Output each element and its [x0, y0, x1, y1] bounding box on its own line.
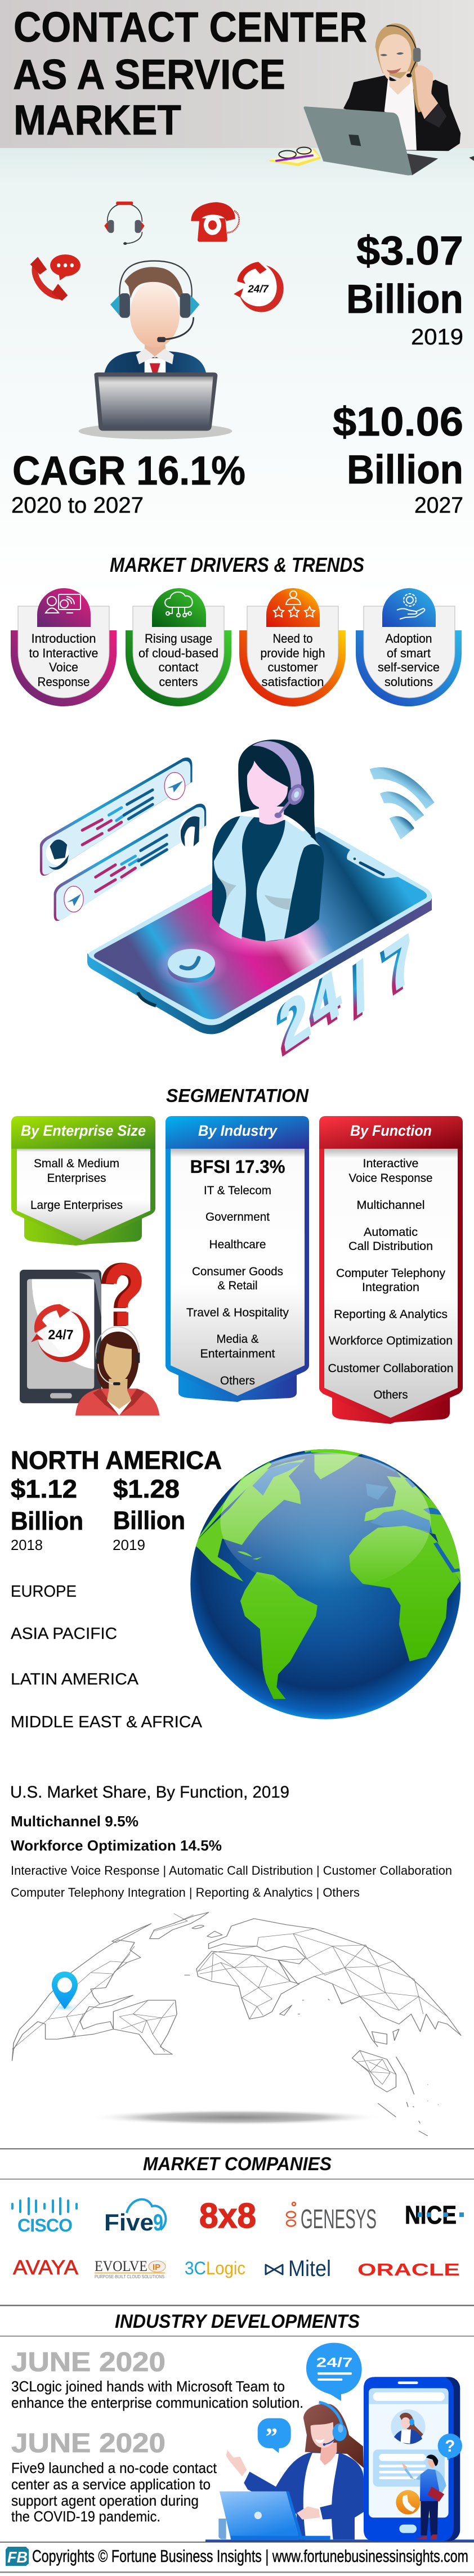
- torso: [104, 351, 206, 374]
- segment labels: Interactive: [363, 1157, 419, 1170]
- hair: [303, 2404, 364, 2468]
- segment labels: Computer Telephony: [336, 1267, 445, 1280]
- left vest: [214, 816, 254, 939]
- headband: [252, 741, 301, 788]
- mouth: [387, 68, 401, 74]
- segment labels: Call Distribution: [348, 1240, 433, 1253]
- headset band: [119, 261, 192, 297]
- card text: to Interactive: [29, 646, 98, 660]
- development: 3CLogic: enhance the enterprise communication solution.: [11, 2394, 303, 2411]
- 24/7 lettering: 2: [272, 981, 312, 1069]
- icon: red telephone: [191, 202, 239, 242]
- logo: Avaya: AVAYA: [13, 2256, 78, 2279]
- africa outline: [196, 1951, 299, 2019]
- icon: 24/7 clock: [31, 1304, 90, 1362]
- segment labels: Customer Collaboration: [328, 1362, 454, 1375]
- region list: LATIN AMERICA: [11, 1670, 139, 1688]
- lower hand: [297, 2506, 320, 2520]
- message lines: [82, 790, 153, 845]
- card text: Voice: [49, 660, 78, 674]
- madagascar and islands: [185, 1975, 343, 2015]
- segment labels: [186, 1157, 289, 1387]
- segment labels: Media &: [216, 1333, 259, 1346]
- wireframe world map: [12, 1912, 461, 2136]
- speech bubble 24/7: [306, 2343, 362, 2401]
- laptop: [220, 2492, 330, 2539]
- hand: [415, 65, 438, 119]
- question mark: ?: [104, 1247, 145, 1343]
- ocean patches: [271, 1453, 459, 1571]
- segment labels: Enterprises: [47, 1172, 106, 1185]
- heading: segmentation: SEGMENTATION: [166, 1085, 309, 1106]
- australia outline: [352, 2050, 414, 2117]
- title: AS A SERVICE: [13, 51, 285, 98]
- laptop lid: [99, 377, 213, 427]
- avatar: [180, 816, 200, 848]
- card text: Introduction: [32, 631, 96, 646]
- stat: 2019 market size: 2019: [411, 325, 463, 350]
- 24/7 lettering: /: [345, 952, 370, 1031]
- icon: 24/7 clock: 24/7: [48, 1327, 74, 1342]
- segment labels: Entertainment: [200, 1347, 275, 1360]
- shirt: [384, 77, 417, 150]
- neck and face: [379, 34, 412, 95]
- logo: Evolve IP: IP: [153, 2263, 160, 2272]
- market share text: Computer Telephony Integration | Reporting & Analytics | Others: [11, 1885, 360, 1899]
- panel: by industry: [166, 1116, 309, 1402]
- region: North America: $1.12: [11, 1475, 77, 1503]
- quote bubble: [258, 2418, 291, 2453]
- question bubble: [438, 2434, 462, 2461]
- logo: Cisco: [12, 2198, 77, 2235]
- phone body: [88, 827, 432, 1025]
- mug: [218, 2519, 226, 2539]
- segment labels: Integration: [362, 1281, 419, 1294]
- region list: [11, 1583, 203, 1731]
- card text: [378, 631, 440, 689]
- tablet: [20, 1270, 101, 1403]
- eyes: [380, 52, 404, 56]
- footer logo: FB: [7, 2548, 28, 2566]
- logo: NICE: NICE: [405, 2201, 457, 2229]
- icon: cloud network: [165, 592, 193, 617]
- alaska strip: [112, 1912, 209, 1942]
- segment labels: BFSI 17.3%: [190, 1157, 285, 1177]
- ear cups: [96, 1352, 140, 1363]
- mediterranean sea: [370, 1509, 432, 1533]
- laptop logo: [348, 135, 361, 146]
- panel: by function: [319, 1116, 463, 1424]
- tablet screen: [27, 1279, 94, 1389]
- 24/7 lettering: 4: [306, 956, 346, 1044]
- logo: 3CLogic: 3C: [185, 2258, 206, 2278]
- triangulation lines: [12, 1914, 448, 2085]
- card: customer satisfaction: [239, 588, 346, 706]
- phone: [364, 2377, 460, 2541]
- icon: 24/7 clock: 24/7: [247, 283, 269, 295]
- panel heading: By Industry: [198, 1122, 278, 1139]
- eurasia outline: [209, 1919, 461, 2035]
- phone camera: [353, 857, 356, 861]
- 24/7 lettering: [272, 920, 420, 1069]
- sleeve: [320, 2502, 351, 2520]
- hudson bay and arctic: [252, 1462, 304, 1495]
- segment labels: Reporting & Analytics: [334, 1308, 448, 1321]
- segment labels: Workforce Optimization: [329, 1334, 453, 1347]
- body: [212, 816, 324, 942]
- stat: 2027 market size: Billion: [347, 447, 463, 492]
- europe and northern asia: [364, 1476, 463, 1586]
- card text: Adoption: [385, 631, 432, 646]
- glasses: [279, 147, 311, 158]
- mic arm: [98, 1364, 114, 1384]
- hair: [124, 267, 183, 298]
- logo: 8x8: 8x8: [199, 2197, 256, 2235]
- card text: contact: [159, 660, 198, 674]
- mic: [275, 801, 290, 818]
- segment labels: Voice Response: [349, 1172, 432, 1185]
- africa: [349, 1526, 459, 1661]
- stat: 2019 market size: [346, 229, 463, 350]
- development: 3CLogic: [11, 2347, 303, 2411]
- region: North America: NORTH AMERICA: [11, 1446, 222, 1475]
- left headset cup: [110, 295, 119, 316]
- development: Five9: center as a service application to: [11, 2476, 211, 2493]
- title: MARKET: [14, 96, 181, 144]
- british isles: [207, 1931, 222, 1937]
- second laptop corner: [469, 156, 474, 161]
- british isles and baltic water: [366, 1484, 443, 1515]
- card: self-service solutions: [356, 588, 462, 706]
- region list: EUROPE: [11, 1583, 77, 1601]
- phone charging port: [138, 992, 156, 1006]
- jacket: [343, 75, 460, 151]
- logo: 3CLogic: [185, 2258, 245, 2278]
- header photo: woman at laptop: [269, 24, 474, 176]
- icon: rating stars and person: [274, 591, 315, 617]
- shirt: [303, 2453, 339, 2539]
- heading: market drivers: MARKET DRIVERS & TRENDS: [110, 553, 364, 576]
- logo: Genesys: GENESYS: [301, 2205, 377, 2234]
- development: Five9: the COVID-19 pandemic.: [11, 2508, 160, 2525]
- right vest: [257, 820, 320, 942]
- market share text: [10, 1783, 452, 1899]
- head: [130, 281, 180, 348]
- jacket: [244, 2452, 364, 2539]
- question bubble: ?: [445, 2437, 455, 2456]
- north america: [194, 1459, 305, 1582]
- vest shadows: [217, 876, 291, 910]
- location pin: [48, 1972, 82, 2012]
- greenland: [314, 1454, 361, 1479]
- region: North America: Billion: [113, 1506, 185, 1535]
- stat: 2019 market size: $3.07: [356, 229, 463, 274]
- 24/7 lettering: 2: [275, 977, 315, 1065]
- card text: Need to: [272, 631, 313, 646]
- card: interactive voice response: [11, 588, 117, 706]
- logo: Five9: 9: [153, 2209, 163, 2235]
- laptop lid: [303, 106, 412, 176]
- development: Five9: support agent operation during: [11, 2492, 199, 2509]
- headset: [319, 2402, 342, 2426]
- neck: [259, 806, 284, 825]
- segment labels: [30, 1157, 123, 1212]
- notebook: [269, 149, 321, 166]
- market share text: U.S. Market Share, By Function, 2019: [10, 1783, 289, 1802]
- 24/7 lettering: 4: [303, 960, 343, 1047]
- header background: [0, 0, 474, 598]
- notebook page: [270, 149, 319, 163]
- hair: [375, 24, 426, 113]
- logo: Five9: [104, 2199, 166, 2235]
- keyboard base: [406, 154, 438, 176]
- stat: CAGR: CAGR 16.1%: [12, 449, 245, 494]
- screen glow: [154, 940, 229, 990]
- segment labels: Healthcare: [209, 1238, 266, 1251]
- heading: market companies: MARKET COMPANIES: [143, 2153, 332, 2174]
- illustration: agent with red icons: [30, 201, 284, 440]
- logo: Mitel: Mitel: [288, 2256, 331, 2281]
- agent woman: [212, 740, 324, 942]
- 24/7 lettering: 7: [380, 920, 420, 1008]
- call button: [396, 2490, 421, 2515]
- region: North America: 2019: [113, 1536, 145, 1553]
- segment labels: IT & Telecom: [204, 1184, 271, 1197]
- send icon: [164, 772, 185, 800]
- tablet home button: [50, 1393, 72, 1399]
- right headset cup: [190, 295, 199, 316]
- jacket: [75, 1388, 159, 1415]
- development: Five9: [11, 2429, 217, 2525]
- wifi waves: [370, 767, 435, 840]
- phone speaker: [360, 863, 383, 875]
- card text: Rising usage: [145, 631, 212, 646]
- stat: 2019 market size: Billion: [346, 277, 463, 322]
- segment labels: Multichannel: [357, 1199, 424, 1212]
- face: [104, 1343, 132, 1382]
- panel heading: By Function: [350, 1122, 432, 1139]
- laptop shadow: [79, 423, 232, 440]
- region: North America: 2018: [11, 1536, 43, 1553]
- market share text: Interactive Voice Response | Automatic Call Distribution | Customer Collaboration: [11, 1863, 452, 1878]
- raised hand: [226, 2450, 247, 2476]
- development: Five9: Five9 launched a no-code contact: [11, 2459, 217, 2476]
- logo: Oracle: ORACLE: [357, 2260, 460, 2279]
- segment labels: Government: [205, 1211, 270, 1224]
- south america outline: [113, 2000, 177, 2054]
- card text: provide high: [260, 646, 325, 660]
- region list: ASIA PACIFIC: [11, 1625, 117, 1643]
- shirt: [107, 1400, 131, 1415]
- avatar: [46, 841, 69, 865]
- development: 3CLogic: JUNE 2020: [11, 2347, 166, 2377]
- logo: Evolve IP: [95, 2258, 166, 2279]
- avatar on screen: [391, 2409, 426, 2444]
- icon: red headset: [104, 201, 145, 245]
- hair: [238, 740, 316, 843]
- logo: Genesys: [287, 2202, 377, 2234]
- globe: [190, 1448, 463, 1719]
- card text: customer: [268, 660, 318, 674]
- ear cup: [285, 782, 307, 808]
- segment labels: Others: [374, 1388, 408, 1401]
- region: North America: $1.28: [113, 1475, 180, 1503]
- message lines: [96, 835, 167, 891]
- neck: [320, 2443, 337, 2465]
- caribbean islands: [238, 1551, 262, 1560]
- market share text: Workforce Optimization 14.5%: [11, 1837, 222, 1854]
- stat: CAGR: [11, 449, 245, 518]
- card: cloud-based contact centers: [126, 588, 231, 706]
- development: 3CLogic: 3CLogic joined hands with Microsoft Team to: [11, 2378, 285, 2395]
- panel heading: By Enterprise Size: [21, 1122, 146, 1139]
- southeast asia islands: [360, 2017, 439, 2136]
- map shadow: [88, 2109, 383, 2125]
- icon: phone and speech bubble: [30, 254, 81, 301]
- chat card: top: [40, 758, 193, 876]
- microphone: [165, 317, 194, 339]
- development: Five9: JUNE 2020: [11, 2429, 166, 2458]
- illustration: support phone and agent: [20, 1247, 159, 1415]
- title: [13, 3, 367, 144]
- 24/7 lettering: 7: [377, 924, 417, 1011]
- quote bubble: ”: [266, 2423, 278, 2450]
- icon: 24/7 clock: [234, 262, 284, 312]
- call button: [168, 949, 215, 983]
- panel: by enterprise size: [11, 1116, 155, 1246]
- logo: Evolve IP: PURPOSE-BUILT CLOUD SOLUTIONS: [95, 2274, 164, 2279]
- region list: MIDDLE EAST & AFRICA: [11, 1713, 203, 1731]
- card text: satisfaction: [261, 675, 324, 689]
- hair: [96, 1332, 139, 1395]
- lapels: [93, 1388, 145, 1415]
- 24/7 lettering: /: [347, 948, 373, 1027]
- woman agent: [75, 1327, 159, 1415]
- stat: 2027 market size: 2027: [414, 493, 463, 518]
- card text: of cloud-based: [138, 646, 218, 660]
- icon: agent and monitor: [46, 594, 81, 613]
- face: [311, 2422, 334, 2448]
- segment labels: & Retail: [217, 1279, 258, 1292]
- speech bubble 24/7: 24/7: [316, 2355, 353, 2371]
- stat: 2027 market size: [333, 400, 463, 518]
- illustration: agent and phone: [205, 2343, 474, 2542]
- region: North America: Billion: [11, 1507, 83, 1535]
- card text: [138, 631, 218, 689]
- segment labels: Travel & Hospitality: [186, 1306, 289, 1319]
- icon: gear over hand: [397, 594, 424, 619]
- sleeve: [425, 103, 446, 128]
- stat: 2027 market size: $10.06: [333, 400, 463, 445]
- man figure: [401, 2454, 446, 2539]
- question mark: ?: [99, 1247, 144, 1343]
- market share text: Multichannel 9.5%: [11, 1813, 138, 1830]
- phone side edge: [87, 898, 432, 1034]
- card text: centers: [159, 675, 198, 689]
- send icon: [64, 886, 83, 912]
- divider lines: [0, 2148, 474, 2573]
- card text: of smart: [387, 646, 431, 660]
- stat: CAGR: 2020 to 2027: [11, 493, 144, 518]
- heading: industry developments: INDUSTRY DEVELOPMENTS: [115, 2311, 360, 2332]
- tablet reflection: [75, 1273, 101, 1317]
- region: North America: [11, 1446, 222, 1553]
- headset band: [96, 1327, 139, 1360]
- ground line: [205, 2539, 474, 2542]
- big woman: [226, 2402, 364, 2539]
- logo: Five9: Five: [104, 2209, 154, 2235]
- laptop: [94, 373, 217, 431]
- logo: 3CLogic: Logic: [206, 2258, 245, 2278]
- card text: Response: [37, 675, 90, 689]
- agent figure: [104, 261, 206, 374]
- headset: [387, 26, 421, 77]
- neck: [107, 1379, 131, 1409]
- chat card: bottom: [54, 804, 206, 921]
- logo: Mitel: [266, 2256, 331, 2281]
- phone screen: [94, 832, 427, 1019]
- green rim: [194, 1448, 461, 1545]
- segment labels: Small & Medium: [34, 1157, 119, 1170]
- card text: [29, 631, 98, 689]
- illustration: 3D phone with agent: [40, 740, 435, 1069]
- segment labels: Others: [220, 1374, 255, 1387]
- screen glow under agent: [208, 911, 332, 958]
- segment labels: Consumer Goods: [192, 1265, 283, 1278]
- segment labels: [328, 1157, 454, 1401]
- pen: [275, 155, 314, 161]
- segment labels: Large Enterprises: [30, 1199, 123, 1212]
- footer: [6, 2546, 468, 2566]
- segment labels: Automatic: [364, 1226, 418, 1239]
- card text: [260, 631, 325, 689]
- north america outline: [12, 1940, 141, 2060]
- logo: Evolve IP: EVOLVE: [95, 2258, 147, 2274]
- title: CONTACT CENTER: [14, 3, 367, 51]
- logo: Cisco: CISCO: [17, 2215, 73, 2235]
- smile: [315, 2439, 325, 2443]
- card text: solutions: [384, 675, 433, 689]
- south america: [240, 1572, 318, 1699]
- face: [247, 761, 288, 809]
- message card: [373, 2449, 445, 2487]
- globe gloss: [220, 1453, 431, 1591]
- tablet screen highlight: [32, 1279, 94, 1369]
- card text: self-service: [378, 660, 440, 674]
